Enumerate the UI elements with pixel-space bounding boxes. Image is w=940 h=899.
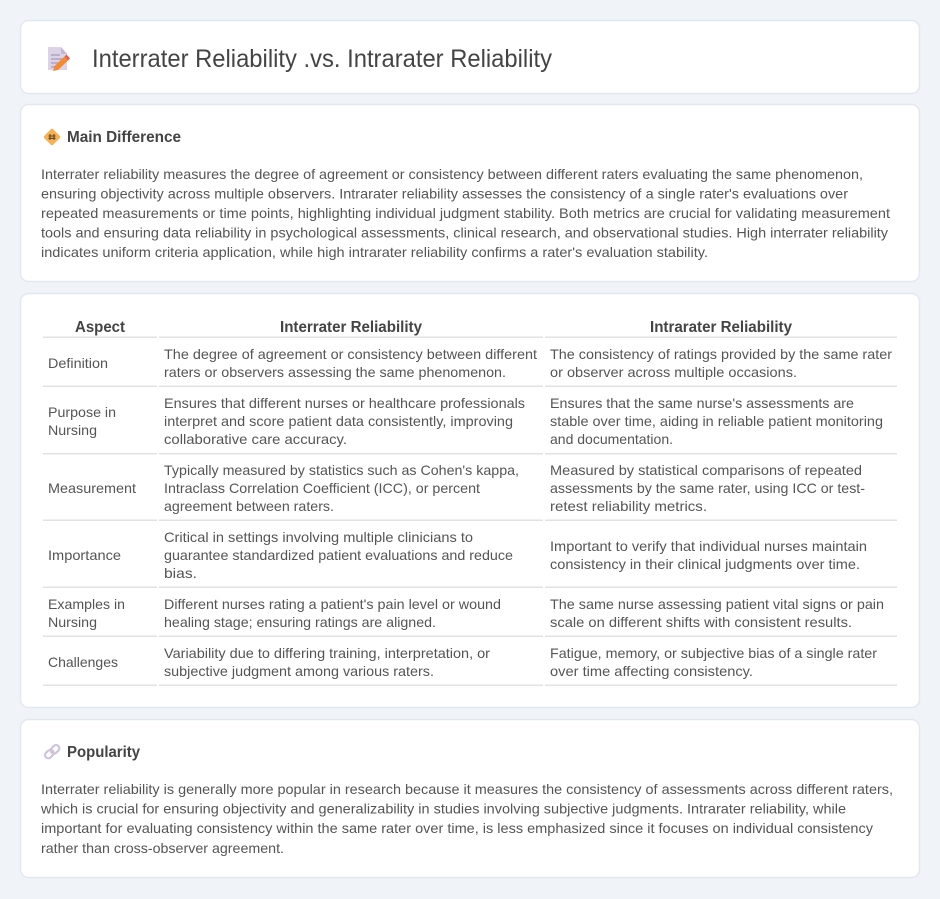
row: purpose in nursing: collaborative care accuracy.: [164, 431, 347, 447]
row: definition: [43, 346, 897, 387]
row: importance: guarantee standardized patient evaluations and reduce: [164, 547, 513, 563]
panel: comparison table: [20, 294, 920, 708]
row: examples in nursing: scale on different shifts with consistent results.: [550, 614, 852, 630]
row: challenges: [43, 645, 897, 686]
text block: main difference body: repeated measurements or time points, highlighting individual judgment stability. Both metrics are crucial for validating measurement: [41, 205, 890, 221]
row: measurement: [43, 462, 897, 521]
row: importance: Important to verify that individual nurses maintain: [550, 538, 867, 554]
row: challenges: over time affecting consistency.: [550, 663, 753, 679]
row: measurement: agreement between raters.: [164, 498, 334, 514]
row: purpose in nursing: Ensures that the same nurse's assessments are: [550, 395, 854, 411]
icon: orange diamond: [43, 128, 61, 146]
row: measurement: Measurement: [48, 480, 136, 496]
row: examples in nursing: healing stage; ensuring ratings are aligned.: [164, 614, 436, 630]
row: examples in nursing: The same nurse assessing patient vital signs or pain: [550, 596, 884, 612]
row: importance: bias.: [164, 565, 197, 581]
panel: popularity: [20, 720, 920, 878]
row: importance: Critical in settings involving multiple clinicians to: [164, 529, 473, 545]
text block: main difference body: Interrater reliability measures the degree of agreement or consistency between different raters evaluating the same phenomenon,: [41, 166, 863, 182]
heading: main difference: Main Difference: [67, 129, 181, 146]
row: challenges: subjective judgment among various raters.: [164, 663, 434, 679]
heading: popularity: Popularity: [67, 744, 140, 761]
icon: document with pencil: [48, 47, 70, 71]
row: definition: Definition: [48, 355, 108, 371]
row: purpose in nursing: interpret and score patient data consistently, improving: [164, 413, 513, 429]
row: measurement: assessments by the same rater, using ICC or test-: [550, 480, 865, 496]
row: measurement: Measured by statistical comparisons of repeated: [550, 462, 862, 478]
row: definition: The degree of agreement or consistency between different: [164, 346, 537, 362]
text block: popularity body: [40, 781, 893, 856]
row: measurement: Intraclass Correlation Coefficient (ICC), or percent: [164, 480, 480, 496]
table header: Aspect: [75, 319, 126, 336]
title: Interrater Reliability .vs. Intrarater Reliability: [92, 45, 552, 73]
row: purpose in nursing: Purpose in: [48, 404, 116, 420]
row: examples in nursing: Examples in: [48, 596, 125, 612]
row: definition: raters or observers assessing the same phenomenon.: [164, 364, 506, 380]
row: measurement: retest reliability metrics.: [550, 498, 707, 514]
panel: title card: [20, 20, 920, 94]
row: importance: consistency in their clinical judgments over time.: [550, 556, 860, 572]
text block: main difference body: indicates uniform criteria application, while high intrarater reliability confirms a rater's evaluation stability.: [41, 244, 708, 260]
text block: popularity body: important for evaluating consistency within the same rater over time, is less emphasized since it focuses on individual consistency: [41, 820, 873, 836]
row: importance: Importance: [48, 547, 121, 563]
text block: main difference body: ensuring objectivity across multiple observers. Intrarater reliability assesses the consistency of a single rater's evaluations over: [41, 186, 848, 202]
text block: main difference body: [41, 166, 890, 260]
panel: main difference: [20, 104, 920, 282]
table header: [43, 319, 897, 338]
row: examples in nursing: [43, 596, 897, 637]
row: purpose in nursing: Nursing: [48, 422, 97, 438]
row: purpose in nursing: and documentation.: [550, 431, 673, 447]
table header: Intrarater Reliability: [650, 319, 792, 336]
row: purpose in nursing: stable over time, aiding in reliable patient monitoring: [550, 413, 883, 429]
row: challenges: Fatigue, memory, or subjective bias of a single rater: [550, 645, 877, 661]
text block: popularity body: rather than cross-observer agreement.: [41, 840, 284, 856]
row: definition: The consistency of ratings provided by the same rater: [550, 346, 892, 362]
text block: main difference body: tools and ensuring data reliability in psychological assessments, clinical research, and observational studies. High interrater reliability: [41, 224, 888, 240]
row: purpose in nursing: [43, 395, 897, 454]
text block: popularity body: which is crucial for ensuring objectivity and generalizability in studies involving subjective judgments. Intrarater reliability, while: [40, 800, 846, 816]
table header: Interrater Reliability: [280, 319, 422, 336]
row: challenges: Challenges: [48, 654, 118, 670]
row: importance: [43, 529, 897, 588]
row: challenges: Variability due to differing training, interpretation, or: [164, 645, 490, 661]
row: examples in nursing: Nursing: [48, 614, 97, 630]
icon: chain link: [44, 744, 61, 760]
text block: popularity body: Interrater reliability is generally more popular in research because it measures the consistency of assessments across different raters,: [41, 781, 893, 797]
row: definition: or observer across multiple occasions.: [550, 364, 797, 380]
row: purpose in nursing: Ensures that different nurses or healthcare professionals: [164, 395, 525, 411]
row: examples in nursing: Different nurses rating a patient's pain level or wound: [164, 596, 501, 612]
row: measurement: Typically measured by statistics such as Cohen's kappa,: [164, 462, 519, 478]
